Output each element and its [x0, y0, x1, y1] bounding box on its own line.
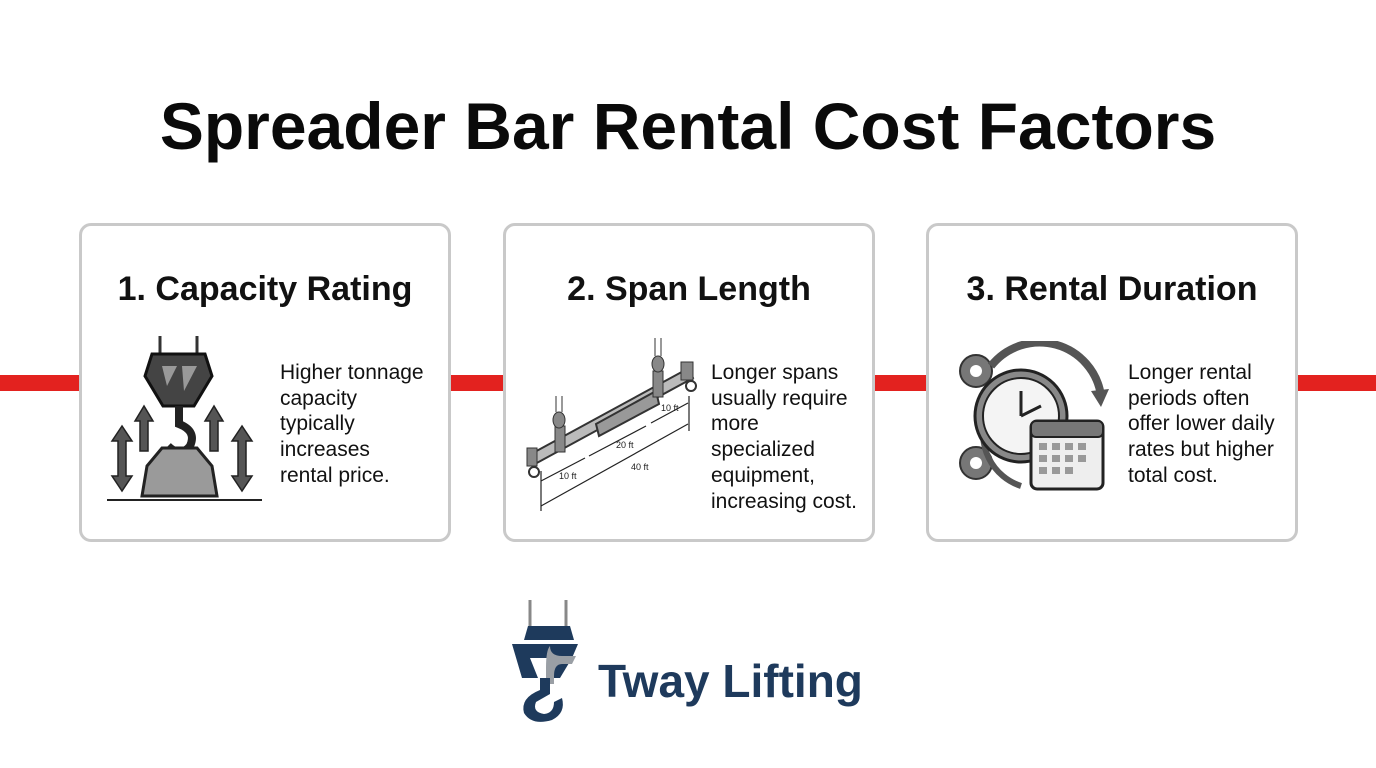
text [280, 361, 424, 487]
text: rental price. [280, 464, 390, 487]
red connecting line [0, 375, 1376, 391]
panel: rental duration [926, 223, 1298, 542]
icon: spreader bar with dimensions [526, 338, 697, 511]
text: periods often [1128, 387, 1249, 410]
icon: spreader bar with dimensions: 10 ft [661, 403, 679, 413]
text: Longer rental [1128, 361, 1252, 384]
panel: capacity rating [79, 223, 451, 542]
text: more [711, 412, 759, 435]
icon: hook logo [512, 600, 578, 722]
text [711, 361, 857, 513]
heading: 1. Capacity Rating [118, 270, 412, 308]
icon: spreader bar with dimensions: 20 ft [616, 440, 634, 450]
text: offer lower daily [1128, 412, 1275, 435]
text: increases [280, 438, 370, 461]
panel: span length [503, 223, 875, 542]
title: Spreader Bar Rental Cost Factors [160, 89, 1216, 163]
text: Higher tonnage [280, 361, 424, 384]
text: specialized [711, 438, 815, 461]
text: usually require [711, 387, 848, 410]
heading: 3. Rental Duration [967, 270, 1257, 308]
text: Longer spans [711, 361, 838, 384]
icon: clock, gears and calendar [959, 341, 1109, 490]
text: total cost. [1128, 464, 1218, 487]
icon: hook lifting weight [107, 336, 262, 501]
text: rates but higher [1128, 438, 1274, 461]
icon: spreader bar with dimensions: 10 ft [559, 471, 577, 481]
logo [512, 600, 863, 722]
text: equipment, [711, 464, 815, 487]
text: increasing cost. [711, 490, 857, 513]
text: typically [280, 412, 355, 435]
icon: spreader bar with dimensions: 40 ft [631, 462, 649, 472]
heading: 2. Span Length [567, 270, 811, 308]
text: capacity [280, 387, 357, 410]
text [1128, 361, 1275, 487]
brand name: Tway Lifting [598, 655, 863, 707]
